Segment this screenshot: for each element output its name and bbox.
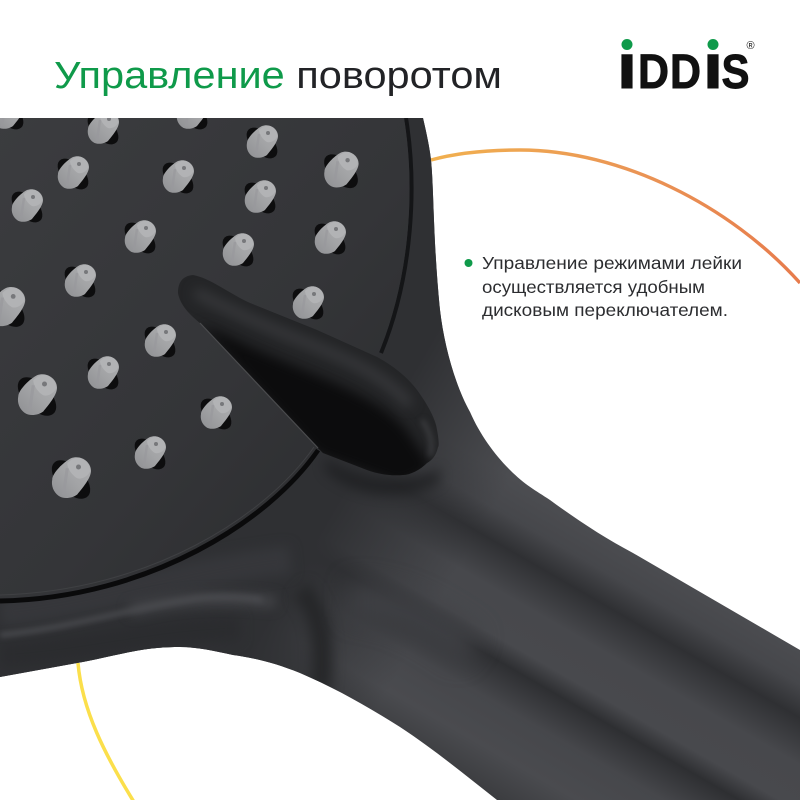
nozzle: [324, 152, 359, 188]
callout bullet: [464, 259, 472, 267]
logo: IDDIS: [618, 39, 755, 99]
logo green dots: [622, 39, 718, 50]
nozzle: [124, 220, 156, 254]
nozzle: [88, 118, 119, 144]
nozzle: [18, 374, 57, 416]
nozzle: [176, 118, 208, 130]
spray disc: [0, 118, 412, 601]
registered mark: ®: [746, 40, 755, 52]
nozzle: [58, 156, 89, 190]
nozzle: [200, 396, 232, 430]
orange arc: [431, 150, 800, 283]
rotary lever switch: [178, 275, 440, 495]
logo wordmark: [618, 46, 750, 99]
nozzle: [314, 221, 346, 254]
callout line 3: дисковым переключателем.: [482, 300, 728, 320]
logo wordmark: D: [670, 46, 701, 99]
callout line 2: осуществляется удобным: [482, 277, 705, 297]
nozzle: [134, 436, 166, 470]
lever shading: [195, 292, 432, 485]
logo wordmark: I: [618, 46, 636, 99]
disc edge highlight: [0, 447, 314, 595]
nozzle: [0, 287, 26, 327]
nozzle: [64, 264, 96, 298]
nozzle: [222, 233, 254, 266]
nozzle: [246, 125, 278, 158]
lever body: [178, 275, 439, 475]
logo wordmark: D: [638, 46, 669, 99]
disc cut edge: [200, 323, 318, 448]
nozzle: [244, 180, 276, 214]
nozzle: [52, 457, 91, 499]
disc face: [0, 118, 410, 528]
lever dark inner face: [208, 328, 430, 476]
nozzle: [292, 286, 324, 320]
handle surface shading: [0, 118, 498, 700]
lever upper highlight: [195, 292, 410, 405]
callout text: [482, 253, 742, 320]
nozzle: [162, 160, 194, 194]
logo wordmark: I: [704, 46, 722, 99]
lever cast shadow: [325, 458, 440, 495]
nozzle: [88, 356, 119, 390]
logo wordmark: S: [722, 46, 750, 99]
yellow arc: [78, 663, 134, 800]
callout line 1: Управление режимами лейки: [482, 253, 742, 273]
lever tip highlight: [422, 420, 432, 456]
nozzle: [12, 189, 43, 222]
disc groove lower: [0, 450, 318, 601]
disc groove upper: [381, 118, 412, 353]
nozzle: [144, 324, 176, 358]
nozzles: [0, 93, 364, 506]
title: Управление поворотом: [54, 55, 502, 97]
nozzle: [0, 118, 24, 130]
